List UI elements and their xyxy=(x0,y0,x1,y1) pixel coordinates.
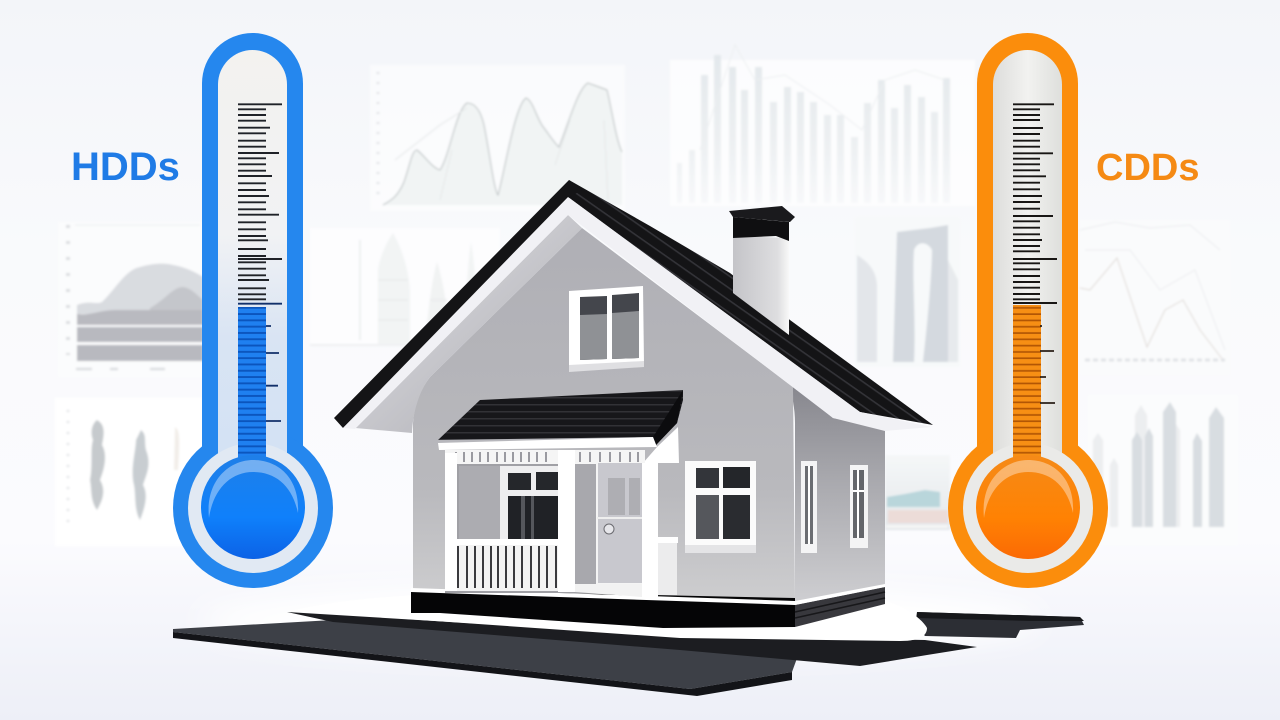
thermometer: blue HDDs xyxy=(173,33,333,588)
floor slab: middle xyxy=(287,612,977,666)
thermometer: orange CDDs xyxy=(948,33,1108,588)
porch side trim xyxy=(643,427,679,463)
chart panel: top right bar chart xyxy=(670,45,975,206)
blue scale ticks xyxy=(238,104,282,299)
railing xyxy=(457,539,559,591)
chart panel: middle left cone chart xyxy=(310,228,500,346)
porch fascia xyxy=(438,437,657,450)
blue outer casing xyxy=(173,33,333,588)
floor slab: back right xyxy=(915,612,1084,638)
blue fill column xyxy=(238,307,266,461)
right roof xyxy=(568,180,933,425)
orange fill column xyxy=(1013,305,1041,461)
orange inner tube xyxy=(993,50,1062,460)
blue ring xyxy=(188,443,318,573)
white platform xyxy=(290,595,927,641)
porch floor xyxy=(575,584,642,597)
left opening wall xyxy=(459,466,558,540)
porch roof side xyxy=(653,390,683,445)
orange outer casing xyxy=(948,33,1108,588)
base band xyxy=(411,584,885,628)
blue bulb highlight xyxy=(209,460,298,518)
fretwork xyxy=(445,450,645,464)
side window two xyxy=(850,465,868,548)
chart panel: top centre area chart xyxy=(370,65,625,211)
blue fill ticks xyxy=(238,304,282,421)
floor slab: large front xyxy=(173,620,800,696)
door xyxy=(575,463,642,584)
chart panel: landscape thumbnail xyxy=(885,455,950,530)
chart panel: bottom right spire chart xyxy=(1088,395,1238,545)
orange fill ticks xyxy=(1040,326,1055,403)
fascia xyxy=(343,197,932,431)
blue inner tube xyxy=(218,50,287,460)
orange bulb highlight xyxy=(984,460,1073,518)
chart panel: bottom left violin chart xyxy=(55,398,202,546)
orange scale ticks xyxy=(1013,104,1057,303)
label: CDDs: CDDs xyxy=(1096,147,1199,189)
porch window xyxy=(500,466,558,540)
orange bulb xyxy=(976,455,1080,559)
upper window xyxy=(569,286,644,372)
porch interior xyxy=(445,463,658,593)
chart panel: right line chart xyxy=(1080,220,1230,375)
side window one xyxy=(801,461,817,553)
front right window xyxy=(685,461,756,553)
chimney xyxy=(729,206,795,335)
soffit xyxy=(355,215,582,433)
porch posts xyxy=(445,450,658,597)
left roof edge xyxy=(334,180,582,428)
ground glow xyxy=(200,584,1040,656)
chart panel: left area chart xyxy=(58,222,203,377)
porch xyxy=(438,390,683,597)
chart panel: right middle shapes xyxy=(855,217,960,367)
side wall xyxy=(787,380,885,605)
house xyxy=(334,180,933,628)
front wall xyxy=(413,228,795,600)
porch roof xyxy=(438,390,683,445)
orange ring xyxy=(963,443,1093,573)
low side wall xyxy=(657,537,678,595)
blue bulb xyxy=(201,455,305,559)
label: HDDs: HDDs xyxy=(71,145,180,189)
